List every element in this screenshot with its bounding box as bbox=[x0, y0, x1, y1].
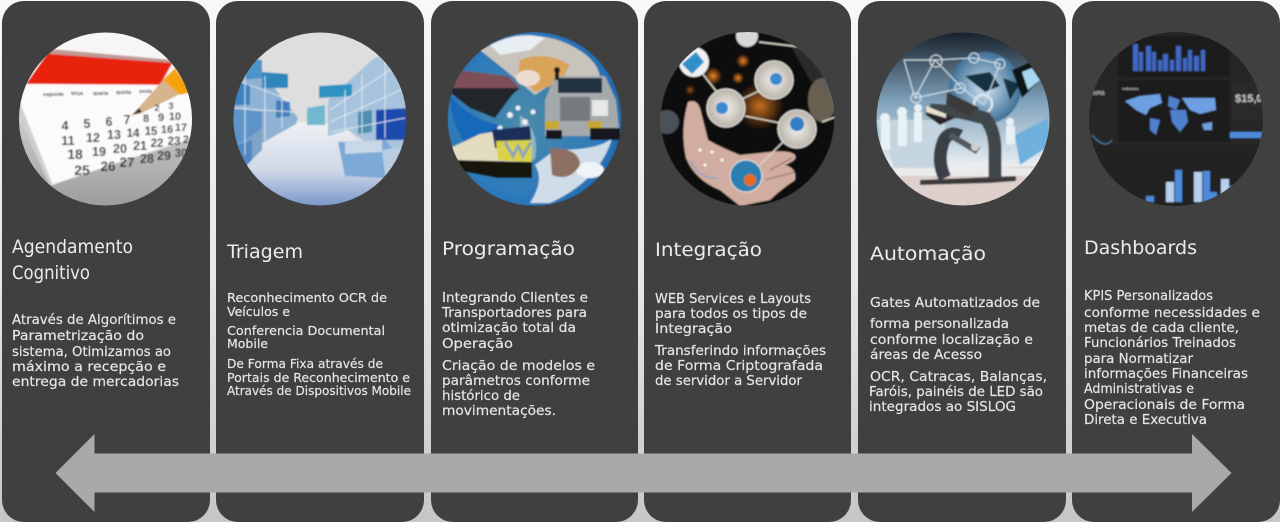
text: Dashboards description: metas de cada cliente, bbox=[1084, 321, 1239, 336]
text: Automação description: Gates Automatizados de bbox=[870, 296, 1040, 311]
panel: Programação bbox=[431, 1, 638, 522]
icon: calendar photo: 26 bbox=[100, 159, 116, 174]
text: Dashboards description: para Normatizar bbox=[1084, 352, 1194, 367]
text: Dashboards description: Direta e Executiva bbox=[1084, 413, 1207, 428]
panel: Dashboards bbox=[1072, 1, 1280, 522]
text: Agendamento description: máximo a recepção e bbox=[12, 359, 166, 375]
text: Triagem description: Portais de Reconhecimento e bbox=[227, 370, 410, 385]
heading: Automação: Automação bbox=[870, 243, 986, 265]
icon: dark analytics dashboard: Indicators bbox=[1122, 87, 1139, 91]
icon: calendar photo: segunda bbox=[43, 92, 64, 98]
panel: Automação bbox=[858, 1, 1066, 522]
heading: Integração: Integração bbox=[655, 239, 762, 261]
text: Programação description: Transportadores para bbox=[441, 306, 587, 321]
hand bbox=[683, 101, 796, 206]
icon: robot arm with network bbox=[875, 30, 1055, 210]
text: Automação description: OCR, Catracas, Balanças, bbox=[870, 370, 1047, 385]
icon: calendar photo: quarta bbox=[93, 91, 108, 97]
heading: Programação: Programação bbox=[442, 238, 575, 260]
text: Dashboards description: informações Financeiras bbox=[1084, 367, 1248, 382]
icon: warehouse photo bbox=[230, 30, 410, 210]
text: Agendamento description: entrega de mercadorias bbox=[12, 375, 179, 390]
icon: calendar photo: quinta bbox=[116, 90, 131, 96]
text: Triagem description: De Forma Fixa através de bbox=[227, 356, 383, 371]
text: Integração description: Integração bbox=[655, 322, 732, 337]
panel: Triagem bbox=[216, 1, 424, 522]
icon: dark analytics dashboard: KPIS bbox=[1093, 91, 1105, 97]
icon: calendar photo: 21 bbox=[133, 139, 147, 153]
text: Integração description: WEB Services e Layouts bbox=[655, 292, 811, 307]
text: Programação description bbox=[441, 291, 595, 419]
text: Programação description: histórico de bbox=[442, 388, 520, 404]
heading: Agendamento Cognitivo: Agendamento bbox=[12, 236, 133, 258]
text: Integração description: para todos os tipos de bbox=[655, 307, 807, 322]
icon: calendar photo: 6 bbox=[106, 115, 113, 129]
icon: calendar photo: 4 bbox=[62, 119, 69, 133]
text: Triagem description: Através de Dispositivos Mobile bbox=[227, 383, 411, 398]
icon: globe with ship, truck and train bbox=[446, 32, 622, 206]
icon: calendar photo: 25 bbox=[74, 162, 90, 178]
icon: calendar photo: 29 bbox=[157, 149, 171, 163]
text: Dashboards description: conforme necessidades e bbox=[1084, 306, 1260, 321]
text: Integração description: de Forma Criptografada bbox=[655, 359, 823, 374]
icon: calendar photo: terça bbox=[71, 91, 83, 97]
icon: dark analytics dashboard bbox=[1085, 30, 1267, 210]
heading: Triagem: Triagem bbox=[226, 241, 303, 263]
text: Triagem description bbox=[227, 290, 411, 398]
heading: Dashboards: Dashboards bbox=[1084, 237, 1197, 259]
icon: calendar photo: 3 bbox=[168, 101, 174, 111]
icon: calendar photo: 10 bbox=[169, 111, 181, 123]
text: Dashboards description: KPIS Personalizados bbox=[1084, 289, 1213, 304]
icon: calendar photo: 14 bbox=[127, 128, 140, 140]
text: Automação description: conforme localização e bbox=[870, 333, 1033, 348]
text: Automação description: Faróis, painéis de LED são bbox=[869, 384, 1043, 400]
icon: calendar photo: 13 bbox=[107, 128, 121, 142]
text: Triagem description: Veículos e bbox=[227, 304, 290, 319]
arrow: double-headed timeline arrow bbox=[56, 434, 1232, 512]
text: Agendamento description bbox=[12, 312, 179, 390]
text: Triagem description: Conferencia Documental bbox=[227, 323, 385, 338]
text: Automação description: integrados ao SISLOG bbox=[869, 400, 1016, 415]
icon: calendar photo: 7 bbox=[124, 113, 131, 127]
text: Dashboards description: Administrativas e bbox=[1084, 382, 1194, 397]
text: Programação description: Criação de modelos e bbox=[442, 359, 595, 374]
panel: Agendamento Cognitivo bbox=[2, 1, 210, 522]
text: Dashboards description bbox=[1084, 289, 1260, 428]
panel: Integração bbox=[644, 1, 851, 522]
text: Programação description: parâmetros conforme bbox=[442, 373, 590, 389]
icon: calendar photo: 8 bbox=[143, 113, 149, 125]
icon: calendar photo: 23 bbox=[168, 136, 180, 148]
icon: hand with connected nodes bbox=[655, 25, 838, 206]
icon: calendar photo bbox=[19, 32, 192, 206]
robot bbox=[920, 176, 1016, 185]
icon: calendar photo: 17 bbox=[175, 122, 187, 134]
icon: calendar photo: 24 bbox=[183, 134, 196, 146]
icon: calendar photo: sexta bbox=[139, 89, 152, 95]
icon: calendar photo: 27 bbox=[119, 155, 135, 170]
text: Agendamento description: Parametrização do bbox=[12, 329, 144, 344]
icon: calendar photo: 5 bbox=[84, 117, 91, 131]
icon: calendar photo: 18 bbox=[67, 146, 83, 162]
truck bbox=[545, 76, 620, 136]
icon: calendar photo: 15 bbox=[145, 126, 158, 138]
icon: calendar photo: 22 bbox=[151, 138, 163, 150]
text: Integração description: Transferindo informações bbox=[654, 344, 826, 359]
icon: calendar photo: 11 bbox=[61, 134, 75, 148]
icon: dark analytics dashboard: $15,0 bbox=[1235, 93, 1263, 105]
text: Dashboards description: Funcionários Treinados bbox=[1084, 335, 1236, 351]
text: Automação description: áreas de Acesso bbox=[870, 347, 982, 363]
icon: calendar photo: 16 bbox=[161, 124, 173, 136]
ship bbox=[450, 88, 520, 118]
text: Automação description: forma personalizada bbox=[870, 317, 1009, 332]
icon: calendar photo: 28 bbox=[140, 152, 154, 166]
text: Programação description: movimentações. bbox=[442, 404, 556, 419]
icon: calendar photo: 30 bbox=[175, 148, 187, 160]
text: Automação description bbox=[869, 296, 1047, 415]
text: Programação description: Integrando Clientes e bbox=[442, 291, 588, 306]
links bbox=[702, 42, 838, 165]
text: Triagem description: Reconhecimento OCR de bbox=[227, 290, 387, 305]
text: Agendamento description: sistema, Otimizamos ao bbox=[12, 345, 171, 360]
heading: Agendamento Cognitivo bbox=[12, 236, 133, 284]
text: Triagem description: Mobile bbox=[227, 336, 268, 351]
icon: calendar photo: 12 bbox=[86, 131, 100, 145]
icon: calendar photo: 9 bbox=[158, 112, 164, 124]
icon: calendar photo: 20 bbox=[113, 142, 127, 156]
text: Programação description: Operação bbox=[442, 337, 513, 352]
icon: calendar photo: 19 bbox=[92, 145, 106, 159]
text: Programação description: otimização total da bbox=[442, 321, 576, 336]
text: Dashboards description: Operacionais de Forma bbox=[1084, 398, 1245, 413]
icon: calendar photo: 2 bbox=[154, 103, 160, 113]
text: Integração description bbox=[654, 292, 826, 389]
text: Agendamento description: Através de Algorítimos e bbox=[12, 312, 176, 328]
train bbox=[452, 130, 530, 164]
heading: Agendamento Cognitivo: Cognitivo bbox=[12, 262, 90, 284]
text: Integração description: de servidor a Servidor bbox=[655, 374, 803, 389]
